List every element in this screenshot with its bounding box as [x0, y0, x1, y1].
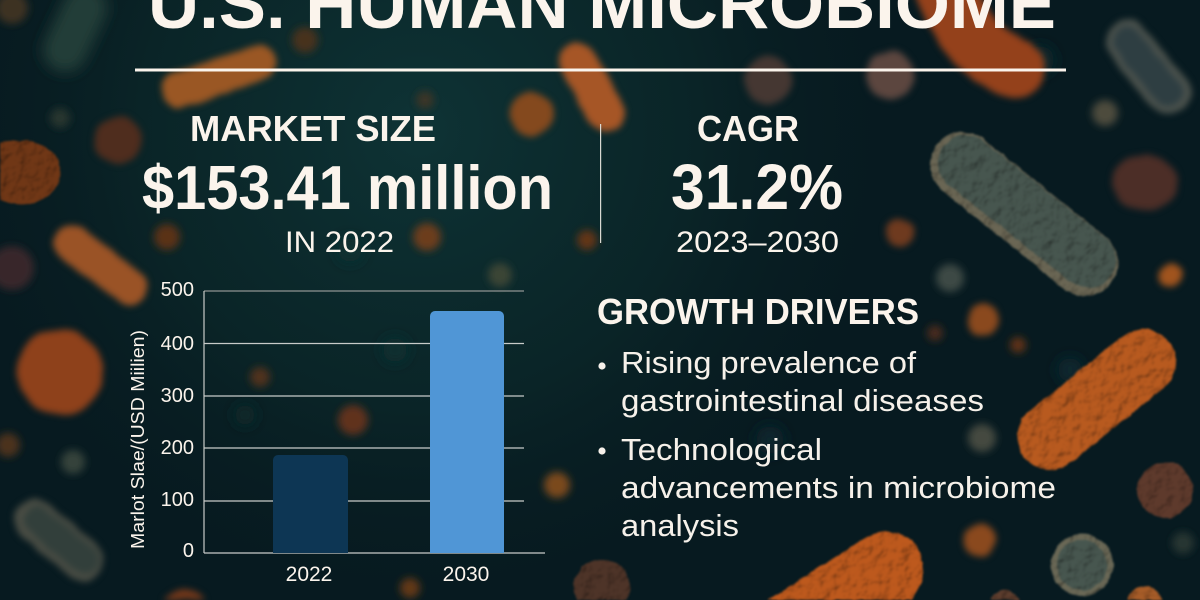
CAGR period: 2023–2030	[676, 226, 839, 259]
y axis ticks	[161, 279, 194, 562]
x axis labels: 2022	[286, 563, 332, 586]
y axis ticks: 0	[183, 540, 194, 562]
y axis ticks: 100	[161, 489, 194, 511]
bar chart	[128, 279, 545, 586]
driver 1: gastrointestinal diseases	[621, 383, 984, 418]
driver 1	[598, 345, 984, 418]
divider	[600, 124, 601, 243]
growth drivers	[597, 291, 1056, 543]
growth drivers heading: GROWTH DRIVERS	[597, 291, 919, 332]
stat: market size	[142, 108, 553, 259]
y axis ticks: 500	[161, 279, 194, 301]
driver 2: analysis	[621, 508, 739, 543]
x axis labels	[286, 563, 489, 586]
market size value: $153.41 million	[142, 154, 553, 223]
driver 2: Technological	[621, 432, 822, 467]
y axis ticks: 200	[161, 437, 194, 459]
CAGR value: 31.2%	[671, 151, 843, 223]
stat: CAGR	[671, 108, 843, 259]
x axis labels: 2030	[443, 563, 489, 586]
market size label: MARKET SIZE	[190, 108, 436, 149]
driver 1: Rising prevalence of	[621, 345, 916, 380]
driver 2: advancements in microbiome	[621, 470, 1056, 505]
y axis ticks: 300	[161, 385, 194, 407]
title rule	[135, 68, 1066, 72]
y axis title: Marlot Slae/(USD Miilien)	[128, 330, 148, 549]
market size year: IN 2022	[285, 226, 394, 259]
driver 2	[598, 432, 1056, 543]
y axis ticks: 400	[161, 333, 194, 355]
bar: 2030	[430, 311, 504, 553]
CAGR label: CAGR	[697, 108, 799, 149]
bar: 2022	[273, 455, 348, 553]
